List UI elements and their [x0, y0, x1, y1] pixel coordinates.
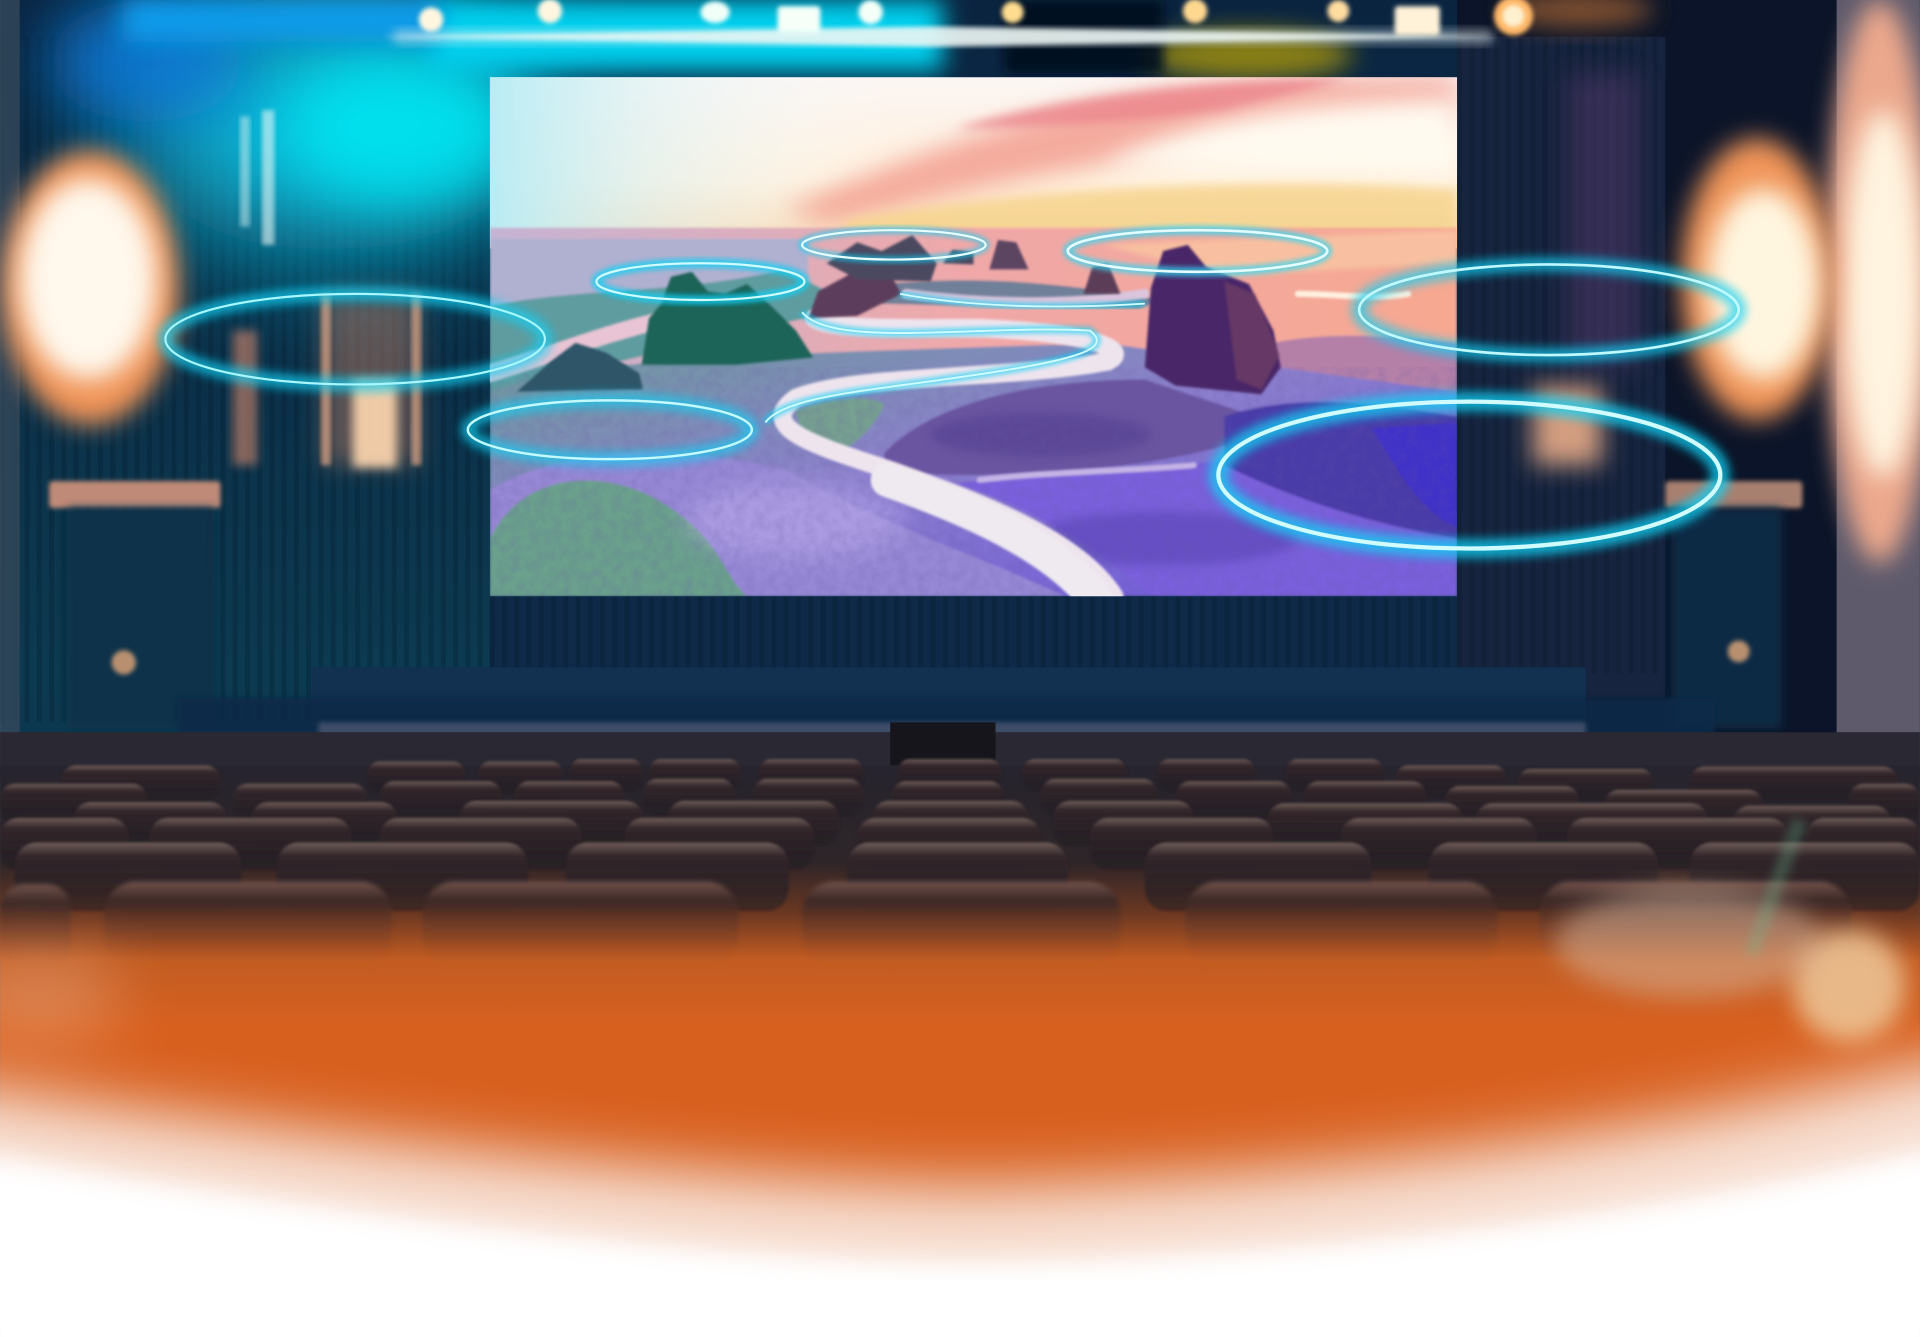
white fade at bottom [0, 949, 1920, 1337]
lens flare bottom right [1555, 820, 1905, 1042]
auditorium floor and orange glow [0, 765, 1920, 1337]
water and land [490, 228, 1457, 596]
seat row 4 [0, 818, 1920, 869]
sky [490, 77, 1457, 249]
sound ring: upper left on screen [596, 263, 805, 300]
seat rows [0, 759, 1920, 970]
coloured stage light wash [49, 0, 1653, 251]
sound ring: top centre [802, 230, 986, 260]
seat row 5 [15, 842, 1920, 911]
sound ring: lower right large [1218, 402, 1720, 549]
stage [0, 667, 1920, 781]
right wall lamp glow [1533, 0, 1920, 759]
seat row 2 [0, 779, 1920, 826]
ceiling light bar [380, 0, 1533, 47]
sound ring: far right [1359, 264, 1739, 355]
karst islands [517, 235, 1281, 394]
seat row 6 [0, 882, 1851, 970]
sound ring: lower left [468, 400, 752, 459]
sound ring: top right on screen [1068, 230, 1327, 272]
left wall lamp glow [0, 0, 421, 759]
winding river [490, 294, 1408, 600]
forest texture [490, 367, 1457, 596]
seat row 1 [61, 759, 1898, 801]
river light trail [765, 294, 1145, 422]
seat row 3 [74, 801, 1892, 850]
cinema screen [490, 77, 1457, 600]
sound ring: far left [165, 294, 545, 384]
